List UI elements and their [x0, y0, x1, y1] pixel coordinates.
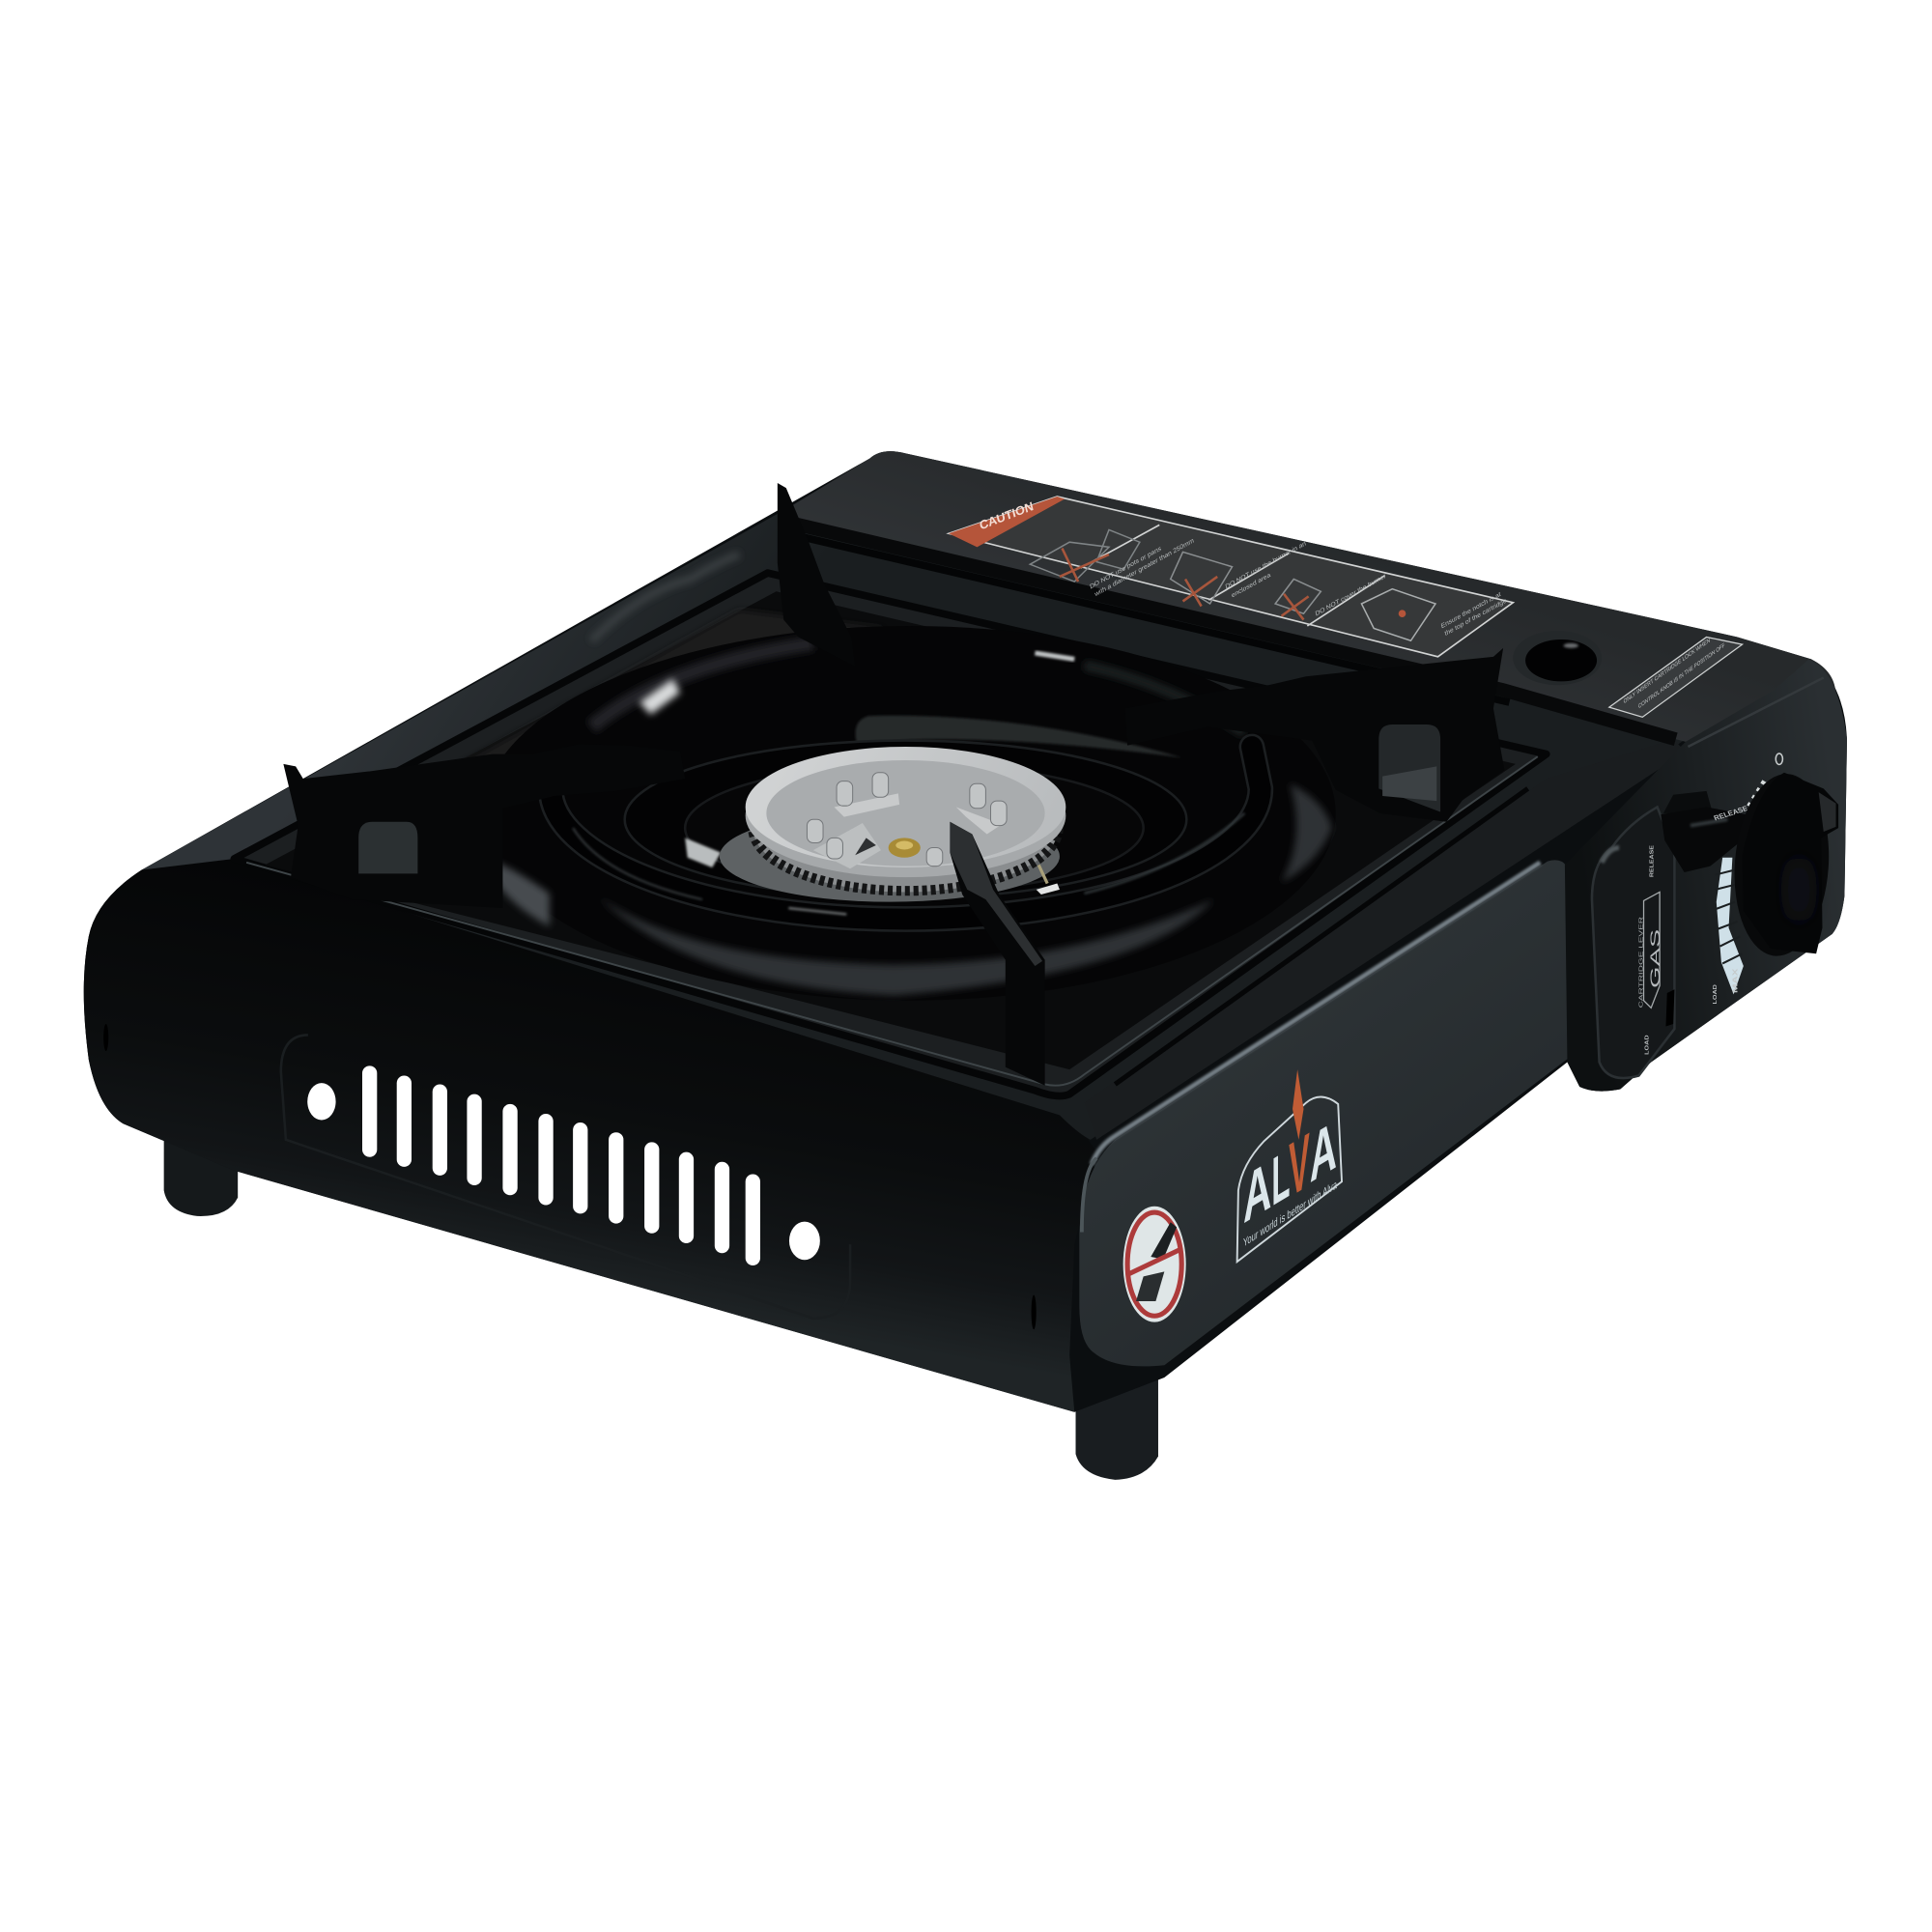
igniter	[1038, 865, 1047, 884]
pot supports	[283, 483, 1504, 1086]
pictogram: enclosed burner	[1171, 540, 1307, 607]
lever slot	[1665, 989, 1674, 1026]
gear ring	[753, 764, 1059, 892]
ALVA logo: V	[1289, 1117, 1310, 1214]
lower rim highlight	[936, 975, 985, 978]
gas knob	[1728, 771, 1838, 959]
side inset panel	[1079, 860, 1570, 1366]
dial label: max: MAX	[1732, 968, 1740, 993]
vent slots	[362, 1065, 760, 1265]
dial label: load: LOAD	[1713, 984, 1718, 1005]
rail top	[788, 451, 1836, 742]
right wall reflection	[1282, 783, 1332, 882]
back support	[778, 483, 855, 667]
ALVA logo: A	[1243, 1146, 1271, 1238]
tube ring	[551, 747, 1261, 919]
pictogram: cloth over burner: DO NOT cover the burner	[1315, 573, 1387, 618]
ALVA logo: L	[1271, 1135, 1290, 1221]
front face	[84, 859, 1096, 1412]
ALVA logo: Your world is better with Alva	[1243, 1178, 1337, 1250]
gas warning label: CONTROL KNOB IS IN THE POSITION OFF	[1638, 642, 1725, 710]
stamped corner groove	[591, 554, 739, 640]
inner recess ring	[685, 764, 1144, 892]
pictogram: enclosed burner: DO NOT use the burner in an	[1225, 540, 1307, 591]
pictogram: cartridge notch: the top of the cartridge	[1444, 597, 1507, 638]
caution header	[949, 497, 1065, 547]
front right foot	[1076, 1374, 1158, 1480]
burner tray	[234, 573, 1547, 1096]
rear left foot	[164, 1133, 238, 1216]
body silhouette	[84, 451, 1847, 1412]
pictogram: oversized pot	[1030, 529, 1195, 599]
cap side	[746, 754, 1065, 877]
gas dial scale	[1713, 781, 1765, 1005]
recess reflection	[685, 838, 721, 867]
pictogram: cartridge notch: Ensure the notch is at	[1440, 591, 1501, 630]
ALVA logo: A	[1310, 1106, 1337, 1198]
vent screw hole left	[307, 1083, 336, 1120]
rail groove	[788, 523, 1676, 739]
front support	[950, 822, 1045, 1086]
pictogram: cloth over burner	[1275, 573, 1387, 620]
right support	[1125, 648, 1504, 822]
outer dish	[483, 626, 1336, 1001]
rear rail with labels	[788, 451, 1836, 742]
top plate	[142, 508, 1686, 1140]
control housing	[1565, 659, 1847, 1092]
dial label: release: RELEASE	[1713, 804, 1749, 822]
gas warning label	[1609, 637, 1743, 717]
caution heading text: CAUTION	[978, 498, 1035, 532]
burner head	[720, 747, 1065, 902]
burner cap	[746, 747, 1065, 867]
front vent recess	[281, 1035, 850, 1319]
cartridge lever plate	[1592, 807, 1674, 1078]
pictogram: oversized pot: with a diameter greater than 250mm	[1094, 537, 1195, 599]
lever text: release: RELEASE	[1650, 845, 1655, 877]
lever bracket	[1663, 791, 1713, 813]
ALVA logo	[1237, 1069, 1342, 1262]
burner dish	[482, 626, 1336, 1001]
pictogram: cartridge notch	[1361, 589, 1507, 640]
burner bridges	[835, 793, 899, 817]
cartridge hole	[1513, 631, 1602, 685]
lever text: load: LOAD	[1645, 1035, 1650, 1055]
pictogram: oversized pot: DO NOT use pots or pans	[1090, 545, 1162, 591]
power mark	[1776, 753, 1782, 764]
caution label	[949, 497, 1513, 657]
vent screw hole right	[789, 1222, 820, 1260]
gas warning label: ONLY INSERT CARTRIDGE LOCK WHEN	[1623, 637, 1711, 705]
burner base	[720, 810, 1060, 902]
lever handle	[1661, 807, 1749, 872]
lower wall crescent	[599, 897, 1213, 996]
left wall reflection	[482, 858, 550, 926]
control panel	[1565, 659, 1847, 1092]
lever gas window	[1644, 892, 1660, 1008]
upper wall reflections	[591, 643, 813, 727]
lever text: gas: GAS	[1648, 929, 1662, 988]
floor patch behind burner	[856, 716, 1182, 757]
brass screw	[889, 838, 921, 858]
outer recess ring	[625, 741, 1186, 898]
pictogram: enclosed burner: enclosed area	[1231, 572, 1271, 599]
no-flame warning sticker	[1123, 1207, 1186, 1322]
stove body	[84, 451, 1847, 1412]
edge holes	[103, 1024, 108, 1051]
lever text: cartridge lever: CARTRIDGE LEVER	[1637, 917, 1644, 1008]
nozzles	[807, 773, 1007, 867]
left support	[283, 744, 685, 908]
